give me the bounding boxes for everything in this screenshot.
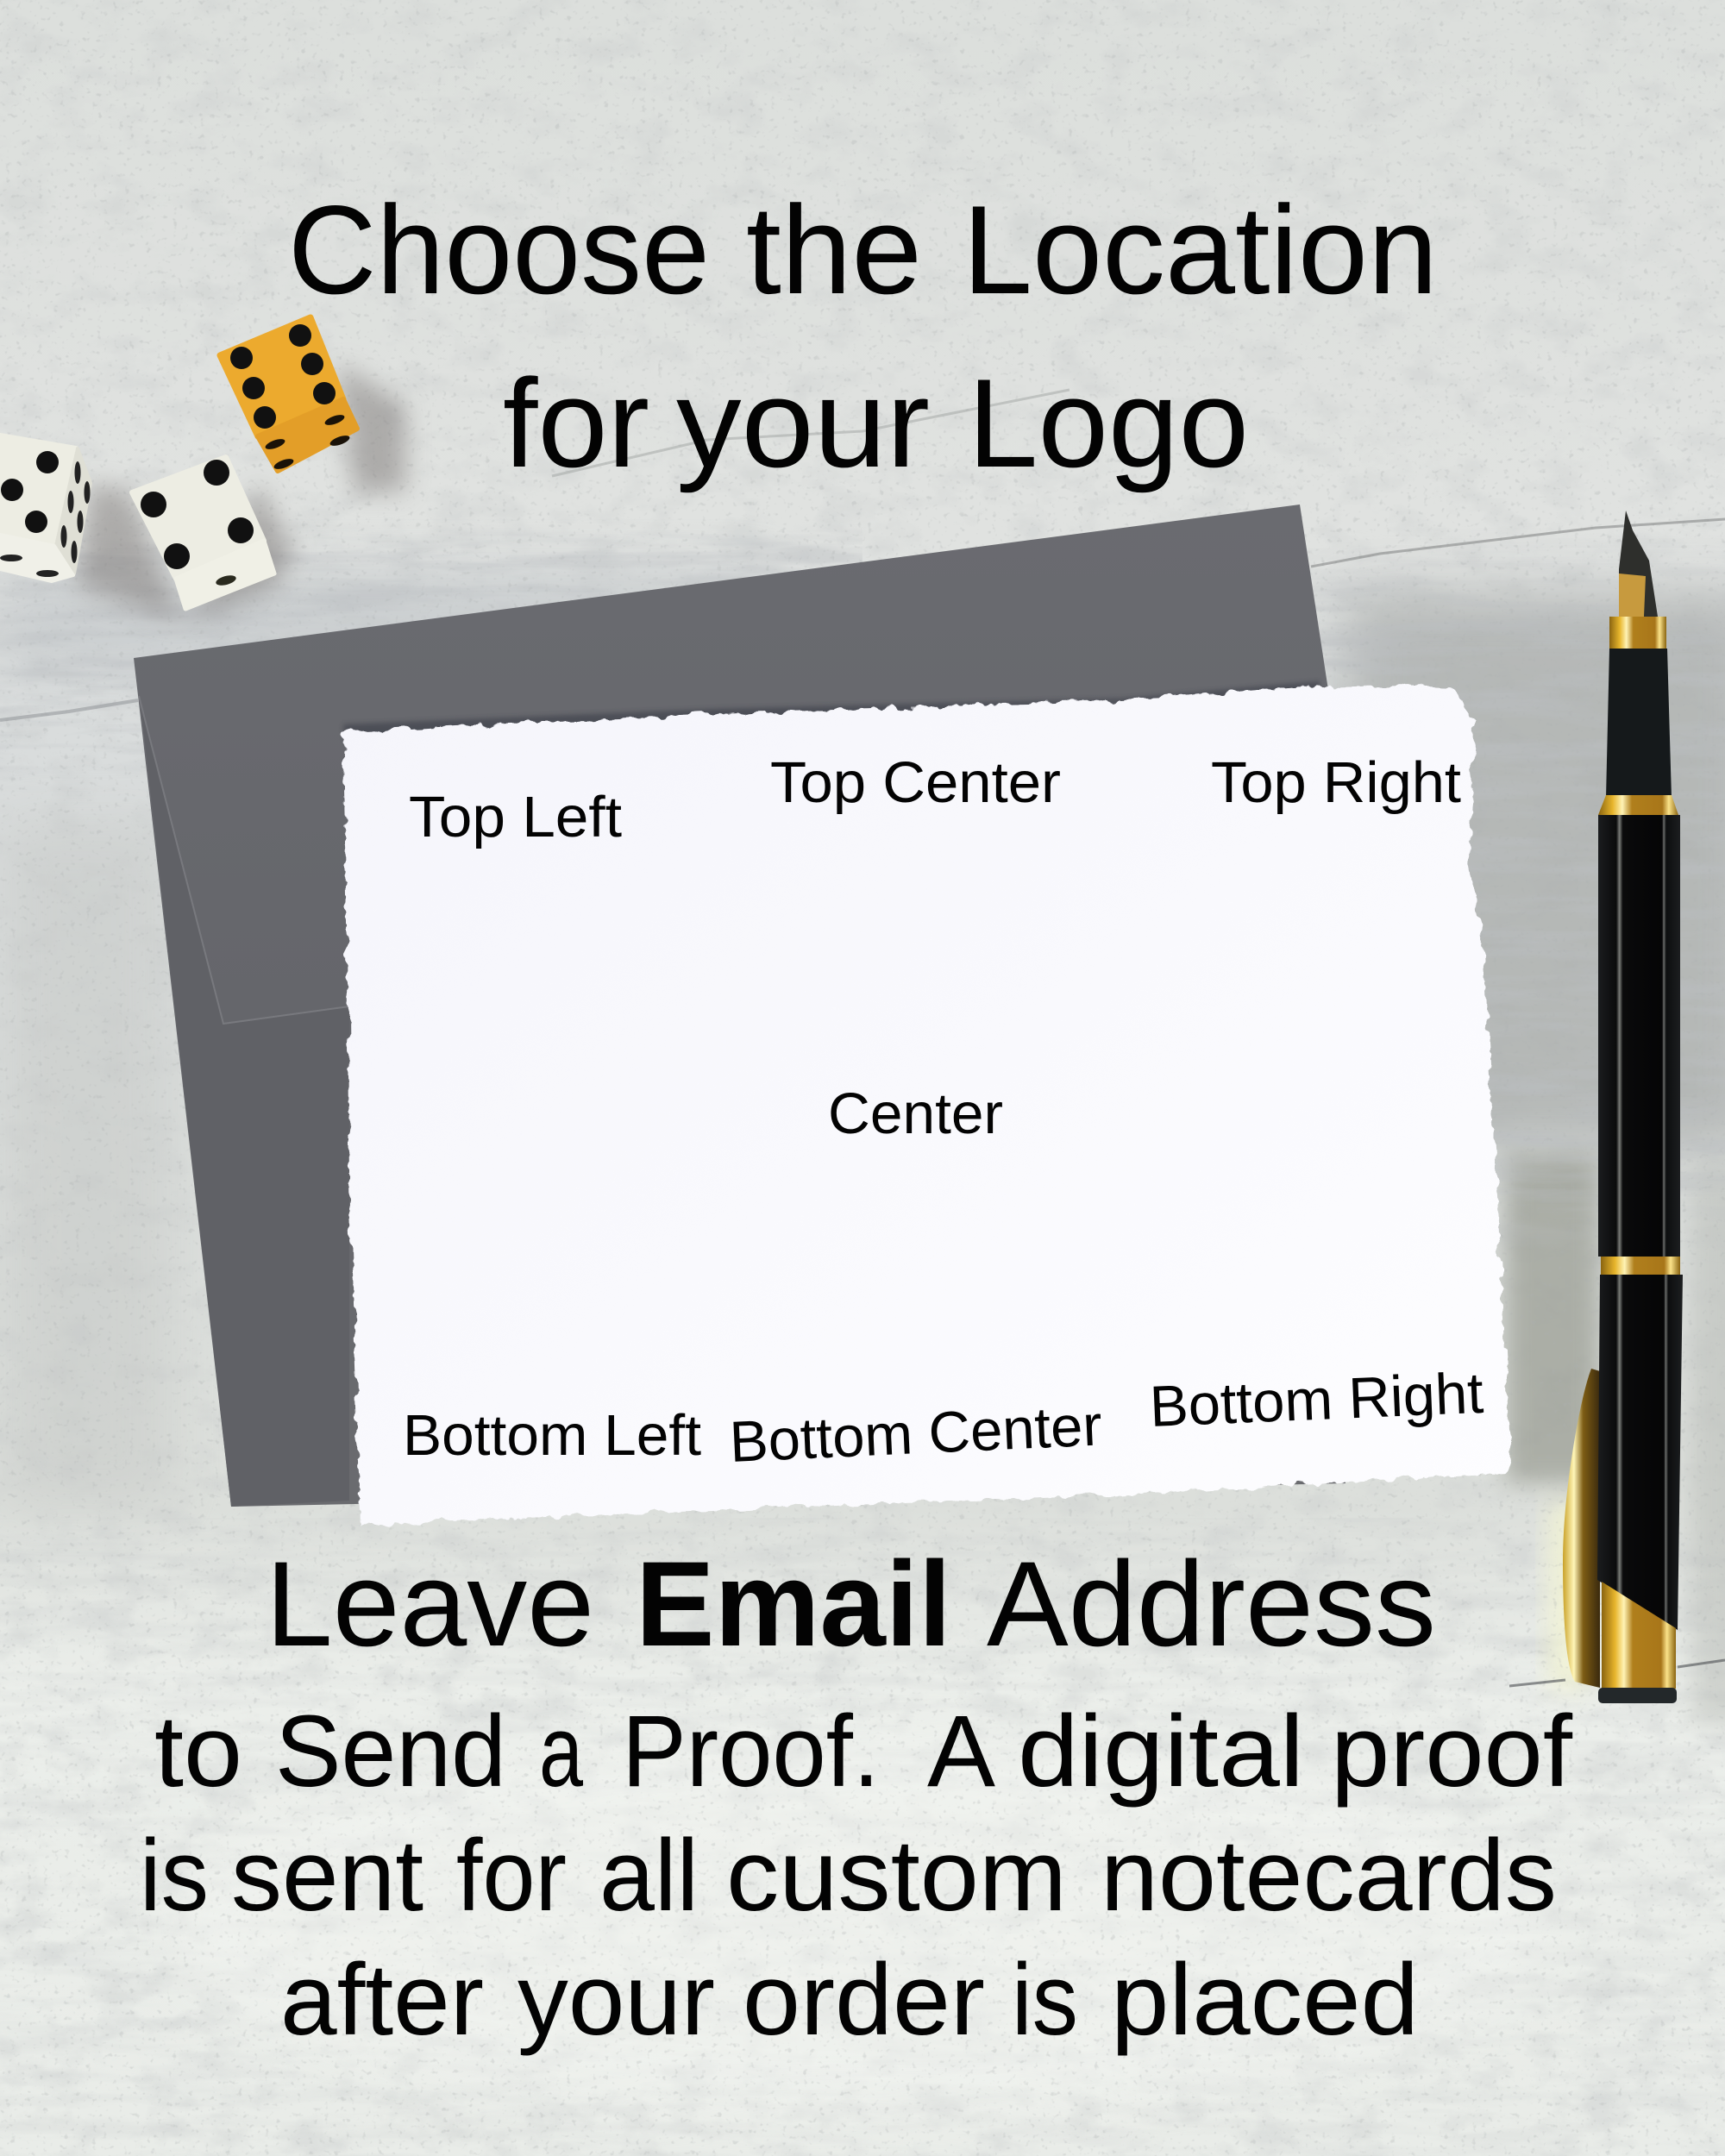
heading: Leave Email Address: Leave [266, 1536, 594, 1671]
text block: proof note: proof [1331, 1695, 1572, 1808]
text block: proof note: is [1012, 1943, 1078, 2057]
text block: proof note: digital [1018, 1695, 1304, 1808]
barrel [1598, 815, 1680, 1257]
lower ring [1601, 1257, 1680, 1275]
text block: proof note: all [599, 1819, 699, 1933]
gold tip [1602, 1582, 1676, 1689]
dice shadows [78, 362, 405, 621]
text block: proof note: placed [1111, 1943, 1419, 2057]
nib [1619, 511, 1658, 617]
text block: proof note: after [280, 1943, 484, 2057]
text block: proof note: is [140, 1819, 209, 1933]
heading: Leave Email Address: Address [987, 1536, 1436, 1671]
text block: proof note: notecards [1101, 1819, 1557, 1933]
text block: proof note: Proof. [622, 1695, 880, 1808]
title: Location [963, 179, 1438, 320]
lower barrel [1597, 1275, 1683, 1630]
text block: proof note: to [154, 1695, 242, 1808]
icon: white die, left [0, 436, 91, 581]
title: the [746, 179, 922, 320]
end cap [1598, 1688, 1677, 1703]
text block: proof note: sent [231, 1819, 423, 1933]
position label: Center: Center [828, 1081, 1003, 1146]
title: your [676, 353, 930, 493]
title [288, 179, 1438, 493]
upper ring [1598, 795, 1678, 815]
position label: Bottom Left: Bottom Left [403, 1403, 701, 1468]
heading: Leave Email Address [266, 1536, 1436, 1671]
envelope flap edge [139, 696, 349, 1024]
collar [1609, 617, 1666, 649]
card shadow [343, 681, 1320, 742]
title: for [503, 353, 649, 493]
position label: Top Right: Top Right [1211, 750, 1461, 815]
text block: proof note: order [743, 1943, 985, 2057]
icon: orange die [220, 317, 357, 471]
text block: proof note: A [927, 1695, 995, 1808]
position label: Top Center: Top Center [770, 750, 1061, 815]
notecard with deckled edge [343, 686, 1511, 1525]
position label: Bottom Center: Bottom Center [728, 1393, 1103, 1475]
clip [1563, 1369, 1600, 1688]
text block: proof note: Send [275, 1695, 506, 1808]
text block: proof note: for [456, 1819, 567, 1933]
envelope lower panel [140, 697, 349, 1507]
icon: white die, center [132, 457, 274, 609]
position label: Bottom Right: Bottom Right [1148, 1361, 1485, 1439]
title: Logo [968, 353, 1249, 493]
text block: proof note: a [539, 1695, 583, 1808]
envelope [134, 505, 1346, 1507]
grip section [1606, 649, 1672, 798]
text block: proof note [140, 1695, 1572, 2057]
text block: proof note: custom [726, 1819, 1067, 1933]
heading: Leave Email Address: Email [636, 1536, 951, 1671]
position label: Top Left: Top Left [409, 785, 622, 849]
title: Choose [288, 179, 710, 320]
text block: proof note: your [518, 1943, 715, 2057]
icon: fountain pen [1563, 511, 1683, 1703]
